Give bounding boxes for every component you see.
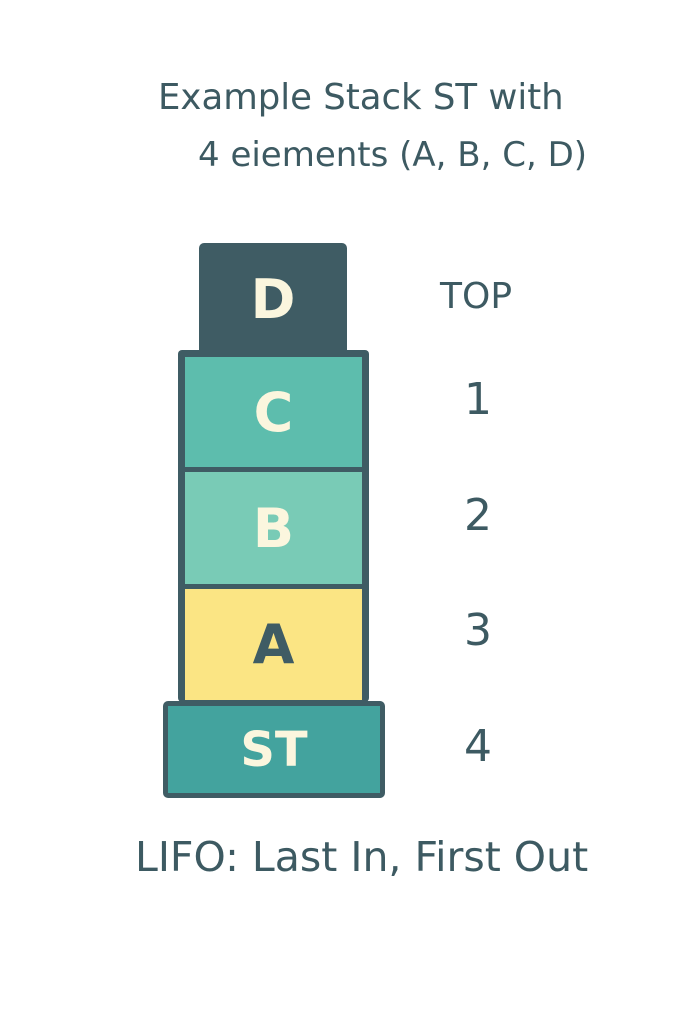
box D (top) <box>199 243 347 355</box>
box C <box>185 357 362 467</box>
box B <box>185 472 362 584</box>
box C: C <box>254 380 293 444</box>
box A <box>185 589 362 700</box>
label 1: 1 <box>464 374 492 425</box>
title <box>158 77 587 175</box>
stack diagram <box>163 243 385 798</box>
title: Example Stack ST with <box>158 77 564 118</box>
label 2: 2 <box>464 490 492 541</box>
label 3: 3 <box>464 605 492 656</box>
base ST <box>163 701 385 798</box>
title: 4 eiements (A, B, C, D) <box>198 135 587 175</box>
base ST: ST <box>240 722 308 778</box>
box B: B <box>253 496 294 560</box>
label 4: 4 <box>464 721 492 772</box>
position labels <box>440 276 512 772</box>
label TOP: TOP <box>440 276 512 317</box>
box D (top): D <box>251 268 295 330</box>
stack frame <box>178 350 369 702</box>
box A: A <box>253 613 294 676</box>
caption: LIFO: LIFO: Last In, First Out <box>135 833 588 881</box>
